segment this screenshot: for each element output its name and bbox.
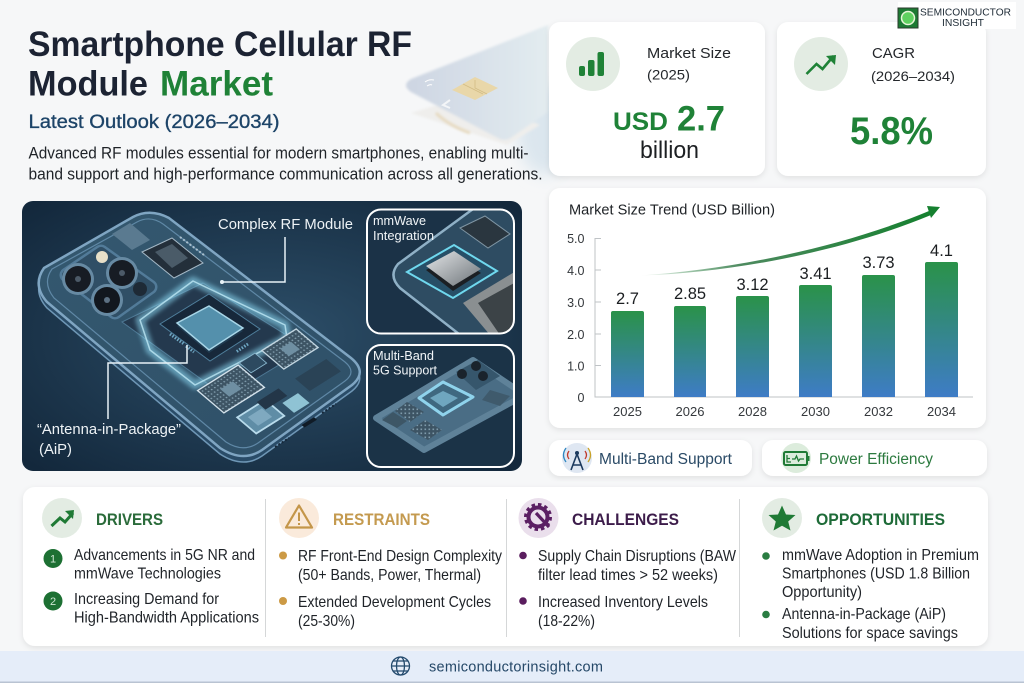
x axis years	[613, 404, 956, 419]
icon: globe	[392, 657, 410, 675]
callout: Antenna-in-Package: “Antenna-in-Package”	[37, 421, 181, 438]
list: opportunities: mmWave Adoption in Premium	[782, 547, 979, 564]
title: Market	[160, 64, 273, 104]
panel: market size trend chart	[549, 188, 986, 428]
list: opportunities: Opportunity)	[782, 584, 862, 601]
list: opportunities: Solutions for space savings	[782, 625, 958, 642]
list: drivers: Increasing Demand for	[74, 591, 220, 608]
title: Smartphone Cellular RF	[28, 25, 412, 64]
x axis years: 2032	[864, 404, 893, 419]
chart axes: 0	[578, 391, 585, 405]
panel: smartphone illustration	[22, 201, 530, 471]
list: challenges: (18-22%)	[538, 613, 595, 630]
panel: market dynamics	[23, 487, 988, 646]
label: market size: Market Size	[647, 45, 731, 62]
column: challenges	[518, 498, 737, 630]
panel: CAGR card	[777, 22, 986, 176]
label: market size	[647, 45, 731, 82]
list: restraints: RF Front-End Design Complexity	[298, 548, 502, 565]
x axis years: 2026	[676, 404, 704, 419]
x axis years: 2030	[801, 404, 830, 419]
list: challenges: Supply Chain Disruptions (BAW	[538, 548, 737, 565]
chart axes: 4.0	[567, 264, 585, 278]
list: drivers	[44, 547, 259, 626]
footer	[0, 651, 1024, 683]
background illustration: SIM cards	[406, 25, 573, 175]
logo: Semiconductor Insight: INSIGHT	[942, 17, 985, 29]
callout: Complex RF Module: Complex RF Module	[218, 216, 353, 233]
icon: trend arrow	[794, 37, 848, 91]
icon: main phone	[39, 213, 360, 462]
x axis years: 2028	[738, 404, 767, 419]
list: challenges	[519, 548, 737, 630]
value: 5.8%: 5.8%	[850, 110, 933, 153]
list: restraints: Extended Development Cycles	[298, 594, 491, 611]
logo: Semiconductor Insight: SEMICONDUCTOR	[920, 6, 1011, 18]
bar values: 2.7	[616, 290, 639, 308]
phone side	[39, 219, 360, 462]
RF module plate	[122, 283, 307, 397]
label: CAGR	[871, 45, 955, 84]
list: opportunities	[762, 547, 979, 642]
pill: Power Efficiency	[762, 440, 987, 476]
list: opportunities: Antenna-in-Package (AiP)	[782, 606, 946, 623]
bar values	[616, 242, 953, 308]
column: opportunities	[762, 498, 979, 642]
inset: mmWave Integration: mmWave	[373, 214, 426, 228]
value: USD 2.7 billion	[613, 100, 725, 164]
subtitle: Latest Outlook (2026–2034)	[28, 112, 280, 133]
pill: Power Efficiency: Power Efficiency	[819, 451, 933, 468]
pill: Multi-Band Support	[549, 440, 752, 476]
upper chips	[142, 238, 203, 278]
phone back	[39, 213, 360, 456]
callout: Antenna-in-Package: (AiP)	[39, 441, 72, 458]
list: restraints: (25-30%)	[298, 613, 355, 630]
inset: mmWave Integration: Integration	[373, 229, 434, 243]
title	[28, 25, 412, 104]
chart axes: 3.0	[567, 296, 585, 310]
icon: bar chart	[566, 37, 620, 91]
callout: Complex RF Module	[218, 216, 353, 284]
description: band support and high-performance communication across all generations.	[28, 164, 542, 184]
label: market size: (2025)	[647, 66, 690, 82]
chart axes: 5.0	[567, 232, 585, 246]
description	[28, 144, 542, 184]
chart axes: 1.0	[567, 360, 585, 374]
bar values: 3.73	[862, 254, 895, 272]
bar values: 3.41	[799, 265, 832, 283]
column: restraints: RESTRAINTS	[333, 510, 430, 529]
x axis years: 2025	[613, 404, 642, 419]
list: drivers: 1	[50, 554, 56, 566]
x axis years: 2034	[927, 404, 956, 419]
module glow ring	[140, 281, 287, 385]
label: CAGR: CAGR	[872, 45, 915, 62]
bar series	[611, 262, 958, 397]
icon: star	[762, 498, 802, 538]
column: opportunities: OPPORTUNITIES	[816, 510, 945, 529]
chart axes	[567, 232, 973, 405]
description: Advanced RF modules essential for modern smartphones, enabling multi-	[28, 144, 528, 162]
icon: warning	[279, 498, 319, 538]
chart title: Market Size Trend (USD Billion)	[569, 202, 775, 218]
inset: Multi-Band 5G Support	[366, 344, 525, 468]
list: opportunities: Smartphones (USD 1.8 Billion	[782, 566, 970, 582]
label: CAGR: (2026–2034)	[871, 68, 955, 84]
list: drivers: 2	[50, 596, 56, 608]
chart axes: 2.0	[567, 328, 585, 342]
column: restraints	[279, 498, 502, 630]
list: drivers: High-Bandwidth Applications	[74, 610, 259, 626]
list: challenges: Increased Inventory Levels	[538, 594, 708, 611]
icon: battery	[781, 443, 811, 473]
list: challenges: filter lead times > 52 weeks)	[538, 567, 718, 584]
pill: Multi-Band Support: Multi-Band Support	[599, 451, 733, 468]
arrow: growth trend	[640, 206, 940, 276]
panel: market size card	[549, 22, 765, 176]
icon: drivers trend	[42, 498, 82, 538]
logo: Semiconductor Insight	[898, 2, 1016, 29]
bar values: 3.12	[736, 276, 769, 294]
value: USD 2.7 billion: USD	[613, 108, 668, 136]
inset: Multi-Band 5G Support: 5G Support	[373, 364, 438, 378]
list: restraints: (50+ Bands, Power, Thermal)	[298, 567, 481, 584]
list: drivers: Advancements in 5G NR and	[74, 547, 255, 564]
title: Module	[28, 64, 148, 104]
column: drivers: DRIVERS	[96, 510, 163, 529]
inset: Multi-Band 5G Support: Multi-Band	[373, 349, 434, 363]
column: challenges: CHALLENGES	[572, 510, 679, 529]
icon: gear and wrench	[518, 498, 558, 538]
lower chips	[262, 329, 318, 369]
bar values: 4.1	[930, 242, 953, 260]
list: restraints	[279, 548, 502, 630]
inset: mmWave Integration	[366, 208, 515, 334]
icon: antenna	[562, 443, 592, 473]
value: USD 2.7 billion: 2.7	[677, 100, 725, 138]
list: drivers: mmWave Technologies	[74, 566, 221, 582]
center chip	[177, 309, 243, 353]
callout: Antenna-in-Package	[37, 345, 187, 458]
footer: semiconductorinsight.com	[429, 660, 603, 676]
column: drivers	[42, 498, 259, 626]
value: USD 2.7 billion: billion	[640, 137, 699, 164]
camera bump	[67, 252, 150, 312]
bar values: 2.85	[674, 285, 706, 303]
